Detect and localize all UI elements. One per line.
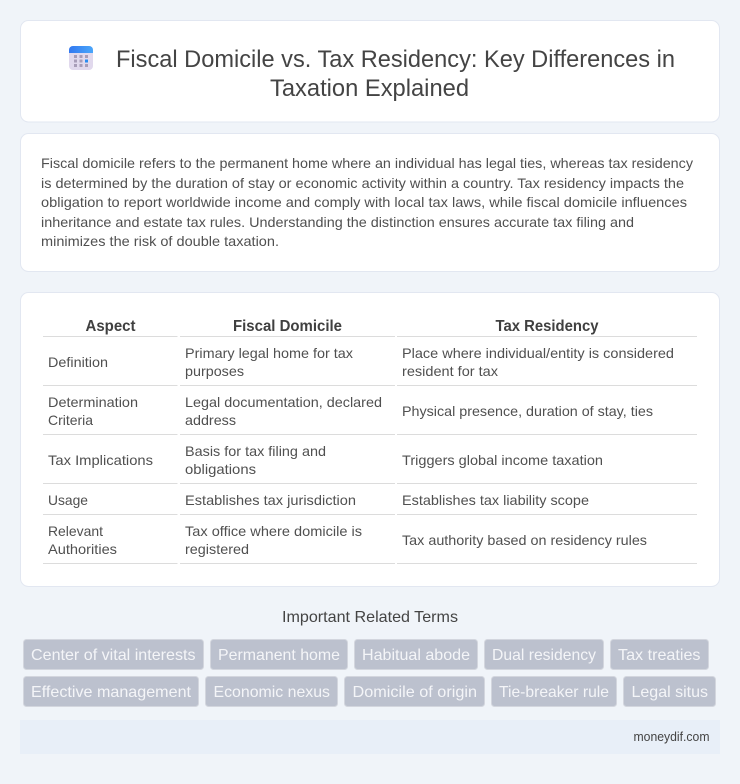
row: usage: Establishes tax liability scope: [402, 492, 589, 508]
row: tax implications: Tax Implications: [48, 452, 153, 468]
chip: habitual abode: [354, 640, 478, 670]
chip: tax treaties: Tax treaties: [618, 647, 700, 664]
title: Taxation Explained: [270, 75, 469, 102]
chip: dual residency: Dual residency: [492, 647, 596, 664]
row: relevant authorities: Relevant: [48, 523, 103, 539]
table row rules: [43, 336, 697, 564]
panel: title card: [20, 20, 720, 122]
row: usage: Establishes tax jurisdiction: [185, 492, 356, 508]
chip: permanent home: [210, 640, 348, 670]
table header: Aspect: [86, 318, 136, 335]
row: definition: resident for tax: [402, 363, 498, 379]
chip: domicile of origin: [344, 676, 484, 706]
chip: tie-breaker rule: Tie-breaker rule: [499, 684, 609, 701]
chip: legal situs: [624, 676, 716, 706]
chip: effective management: [24, 676, 198, 706]
heading: related terms: Important Related Terms: [282, 609, 458, 626]
row: definition: purposes: [185, 363, 244, 379]
chip: habitual abode: Habitual abode: [362, 647, 470, 664]
text block: summary: [41, 155, 693, 249]
chip: dual residency: [484, 640, 604, 670]
chip: effective management: Effective management: [31, 684, 192, 701]
text block: summary: Fiscal domicile refers to the permanent home where an individual has legal ties, whereas tax residency: [41, 155, 693, 171]
row: determination criteria: [48, 394, 653, 428]
row: usage: [48, 492, 589, 508]
row: definition: Primary legal home for tax: [185, 345, 353, 361]
row: definition: [48, 345, 674, 379]
row: relevant authorities: [48, 523, 647, 557]
row: tax implications: [48, 443, 603, 477]
chip: domicile of origin: Domicile of origin: [352, 684, 477, 701]
row: usage: Usage: [48, 492, 88, 508]
chip: economic nexus: Economic nexus: [214, 684, 330, 701]
table header: [86, 318, 599, 335]
chip: tax treaties: [610, 640, 708, 670]
footer: moneydif.com: [634, 729, 710, 744]
text block: summary: minimizes the risk of double taxation.: [41, 233, 279, 249]
panel: related term chips: [24, 640, 716, 706]
row: relevant authorities: Tax office where domicile is: [185, 523, 362, 539]
row: determination criteria: Criteria: [48, 412, 93, 428]
row: relevant authorities: registered: [185, 541, 249, 557]
row: relevant authorities: Authorities: [48, 541, 117, 557]
chip: center of vital interests: Center of vital interests: [31, 647, 196, 664]
row: definition: Definition: [48, 354, 108, 370]
row: tax implications: Basis for tax filing and: [185, 443, 326, 459]
title: Fiscal Domicile vs. Tax Residency: Key Differences in: [116, 46, 675, 73]
table header: Tax Residency: [496, 318, 599, 335]
chip: legal situs: Legal situs: [632, 684, 708, 701]
table header: Fiscal Domicile: [233, 318, 342, 335]
row: determination criteria: address: [185, 412, 236, 428]
icon: calendar: [69, 46, 93, 70]
text block: summary: inheritance and estate tax rules. Understanding the distinction ensures accurate tax filing and: [41, 214, 634, 230]
row: determination criteria: Legal documentation, declared: [185, 394, 382, 410]
row: determination criteria: Physical presence, duration of stay, ties: [402, 403, 653, 419]
footer: [20, 720, 720, 754]
chip: economic nexus: [206, 676, 338, 706]
chip: tie-breaker rule: [492, 676, 616, 706]
chip: permanent home: Permanent home: [218, 647, 340, 664]
text block: summary: is determined by the duration of stay or economic activity within a country. Tax residency impacts the: [41, 175, 684, 191]
row: definition: Place where individual/entity is considered: [402, 345, 674, 361]
panel: comparison table: [20, 292, 720, 586]
text block: summary: obligation to report worldwide income and comply with local tax laws, while fiscal domicile influences: [41, 194, 687, 210]
row: determination criteria: Determination: [48, 394, 138, 410]
row: tax implications: Triggers global income taxation: [402, 452, 603, 468]
chip: center of vital interests: [24, 640, 204, 670]
title: [116, 46, 675, 102]
panel: summary paragraph: [20, 134, 720, 272]
row: relevant authorities: Tax authority based on residency rules: [402, 532, 647, 548]
row: tax implications: obligations: [185, 461, 256, 477]
